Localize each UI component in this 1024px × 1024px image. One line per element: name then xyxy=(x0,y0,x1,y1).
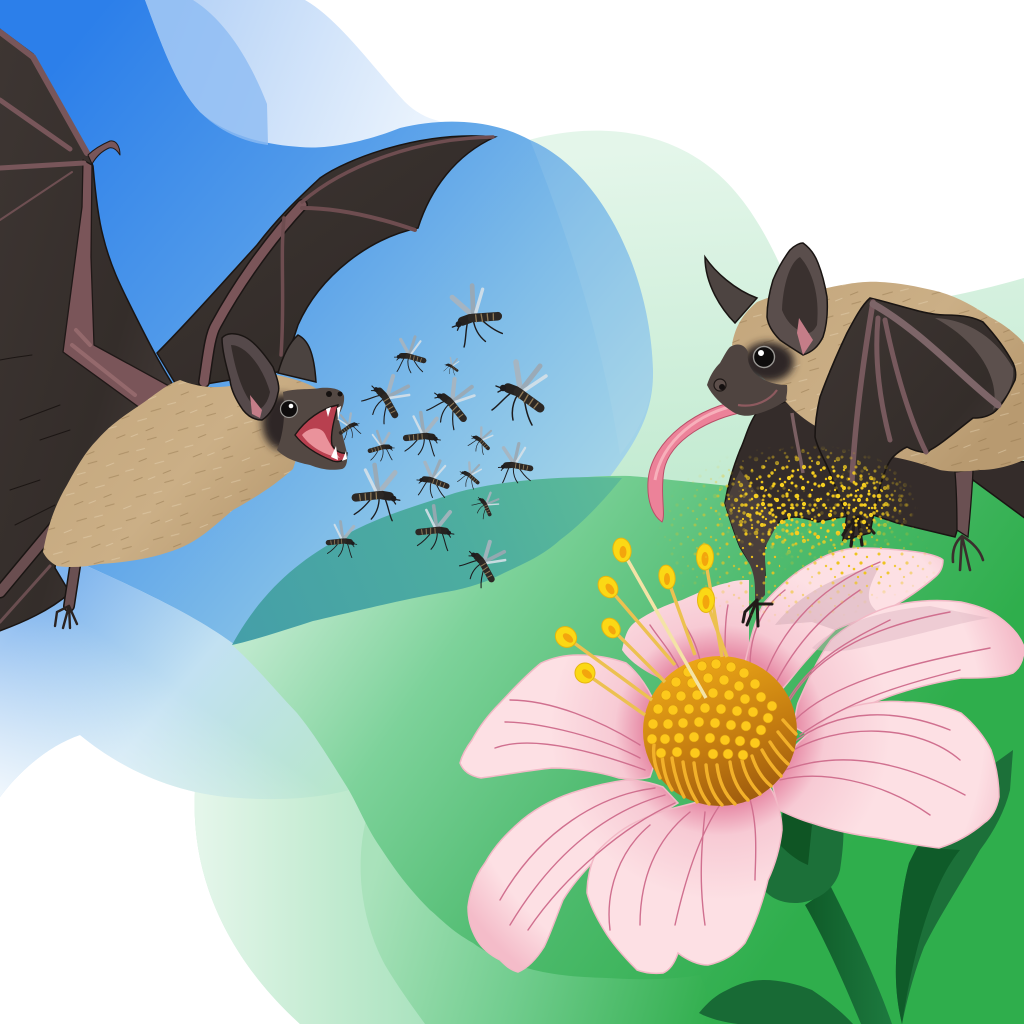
background: lower blue wash xyxy=(0,540,390,799)
flower: petal shadow xyxy=(775,565,880,630)
bat right: folded wing xyxy=(815,298,1016,540)
bat right: wing bones xyxy=(852,302,998,480)
bat right: head xyxy=(707,345,787,416)
bat right: furry body xyxy=(732,282,1024,472)
bat left: eye xyxy=(280,400,298,418)
bat right: front foot xyxy=(743,600,772,626)
bat right: hind foot xyxy=(953,536,983,570)
bat right: inner finger xyxy=(792,413,803,473)
bat left: large near wing xyxy=(0,25,175,633)
bat right: front leg xyxy=(725,470,778,605)
background: blue green overlap xyxy=(232,477,622,645)
flower: bottom petal xyxy=(587,778,782,973)
bat right: eye xyxy=(754,346,774,368)
bat left: far ear xyxy=(278,335,316,382)
flower: right petal xyxy=(794,601,1024,737)
flower: lower right petal xyxy=(771,701,999,848)
bat right: eye mask xyxy=(742,342,794,382)
bat right: tongue xyxy=(648,400,745,522)
flower: left petal xyxy=(460,655,658,779)
bat left: eye mask xyxy=(262,394,302,450)
bat right: nose and mouth xyxy=(714,379,777,406)
flower xyxy=(460,537,1024,1024)
background: main blue blob xyxy=(0,0,653,645)
pollen cloud xyxy=(664,446,936,622)
flower: back petal top xyxy=(622,580,749,680)
background: lighter right band of blue blob xyxy=(530,140,653,455)
bat right xyxy=(640,243,1024,640)
flower: right leaf xyxy=(896,750,1013,1024)
flower: calyx xyxy=(764,810,843,903)
flower: dome ribs xyxy=(654,720,796,805)
bat right: lower body membrane xyxy=(725,400,1024,577)
flower: bottom leaf xyxy=(699,980,853,1024)
background: lighter blue lens xyxy=(145,0,268,145)
background: top pale blue blob xyxy=(100,0,480,300)
flower: bottom left petal xyxy=(468,780,678,972)
flower: stem xyxy=(805,887,892,1024)
bat right: wing crescent xyxy=(935,318,1013,410)
background: lower left fade xyxy=(0,540,390,799)
bat right: far ear xyxy=(705,257,757,323)
bat right: hind leg xyxy=(955,470,973,537)
bat left: nostrils xyxy=(326,391,342,397)
flower: right petal shadow xyxy=(812,606,990,651)
background: pale green blob xyxy=(195,131,1024,1024)
flower: dome florets xyxy=(647,659,777,760)
flower: central dome xyxy=(643,656,797,806)
flower: petal veins xyxy=(495,562,990,930)
bat left: furry body xyxy=(43,375,318,567)
bat left: upper wing bones xyxy=(204,137,493,382)
flower: stamens xyxy=(551,537,727,715)
background: green circle tint xyxy=(195,645,440,1024)
bat right: near ear xyxy=(767,243,827,355)
bat left: head xyxy=(277,388,347,470)
bat left: near ear xyxy=(222,334,279,420)
bat left xyxy=(0,25,495,633)
bat left: hind legs xyxy=(0,520,77,628)
flower: top right petal xyxy=(745,548,943,697)
bat right: second paw xyxy=(843,517,874,546)
mosquito swarm xyxy=(320,279,546,592)
bat left: open mouth xyxy=(295,405,347,462)
bat left: upper far wing xyxy=(157,136,495,388)
background: main green blob xyxy=(232,465,1024,1024)
background: second green circle xyxy=(361,775,1024,1024)
bat left: wing bones xyxy=(0,32,180,525)
